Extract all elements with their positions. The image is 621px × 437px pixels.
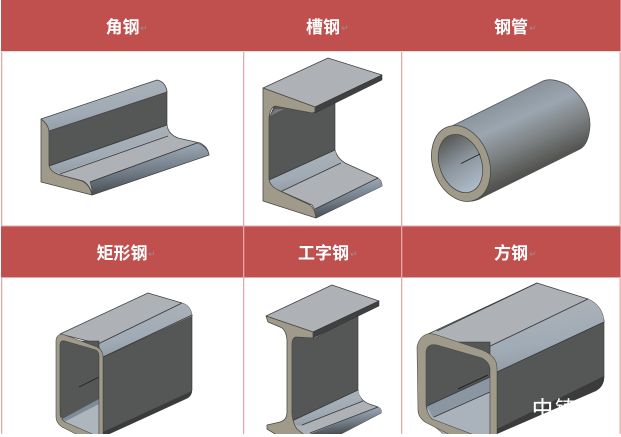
illustration: square steel tube <box>417 283 604 437</box>
heading: channel steel: 槽钢 <box>306 18 340 37</box>
pipe interior <box>431 128 490 199</box>
watermark: 铸 <box>555 398 576 421</box>
heading: angle steel: ↵ <box>140 24 148 34</box>
illustration: channel steel <box>263 58 382 218</box>
heading: rectangular steel: ↵ <box>148 250 156 260</box>
header row 1 <box>1 0 620 52</box>
heading: angle steel: 角钢 <box>106 17 140 37</box>
illustration: steel pipe <box>421 80 590 210</box>
heading: square steel: 方钢 <box>494 243 528 263</box>
watermark: 中 <box>532 398 553 421</box>
heading: channel steel: ↵ <box>341 24 349 34</box>
heading: steel pipe: ↵ <box>529 24 537 34</box>
illustration: rectangular steel tube <box>56 293 192 437</box>
heading: steel pipe: 钢管 <box>494 17 528 37</box>
heading: square steel: ↵ <box>529 250 537 260</box>
heading: rectangular steel: 矩形钢 <box>96 244 148 263</box>
header row 2 <box>1 226 620 278</box>
watermark <box>534 398 574 415</box>
heading: I-beam: ↵ <box>350 250 358 260</box>
illustration: angle steel <box>41 80 209 195</box>
heading: I-beam: 工字钢 <box>298 243 349 263</box>
illustration: I-beam <box>266 285 381 437</box>
pipe seam <box>461 154 480 164</box>
pipe end ring <box>421 117 501 210</box>
